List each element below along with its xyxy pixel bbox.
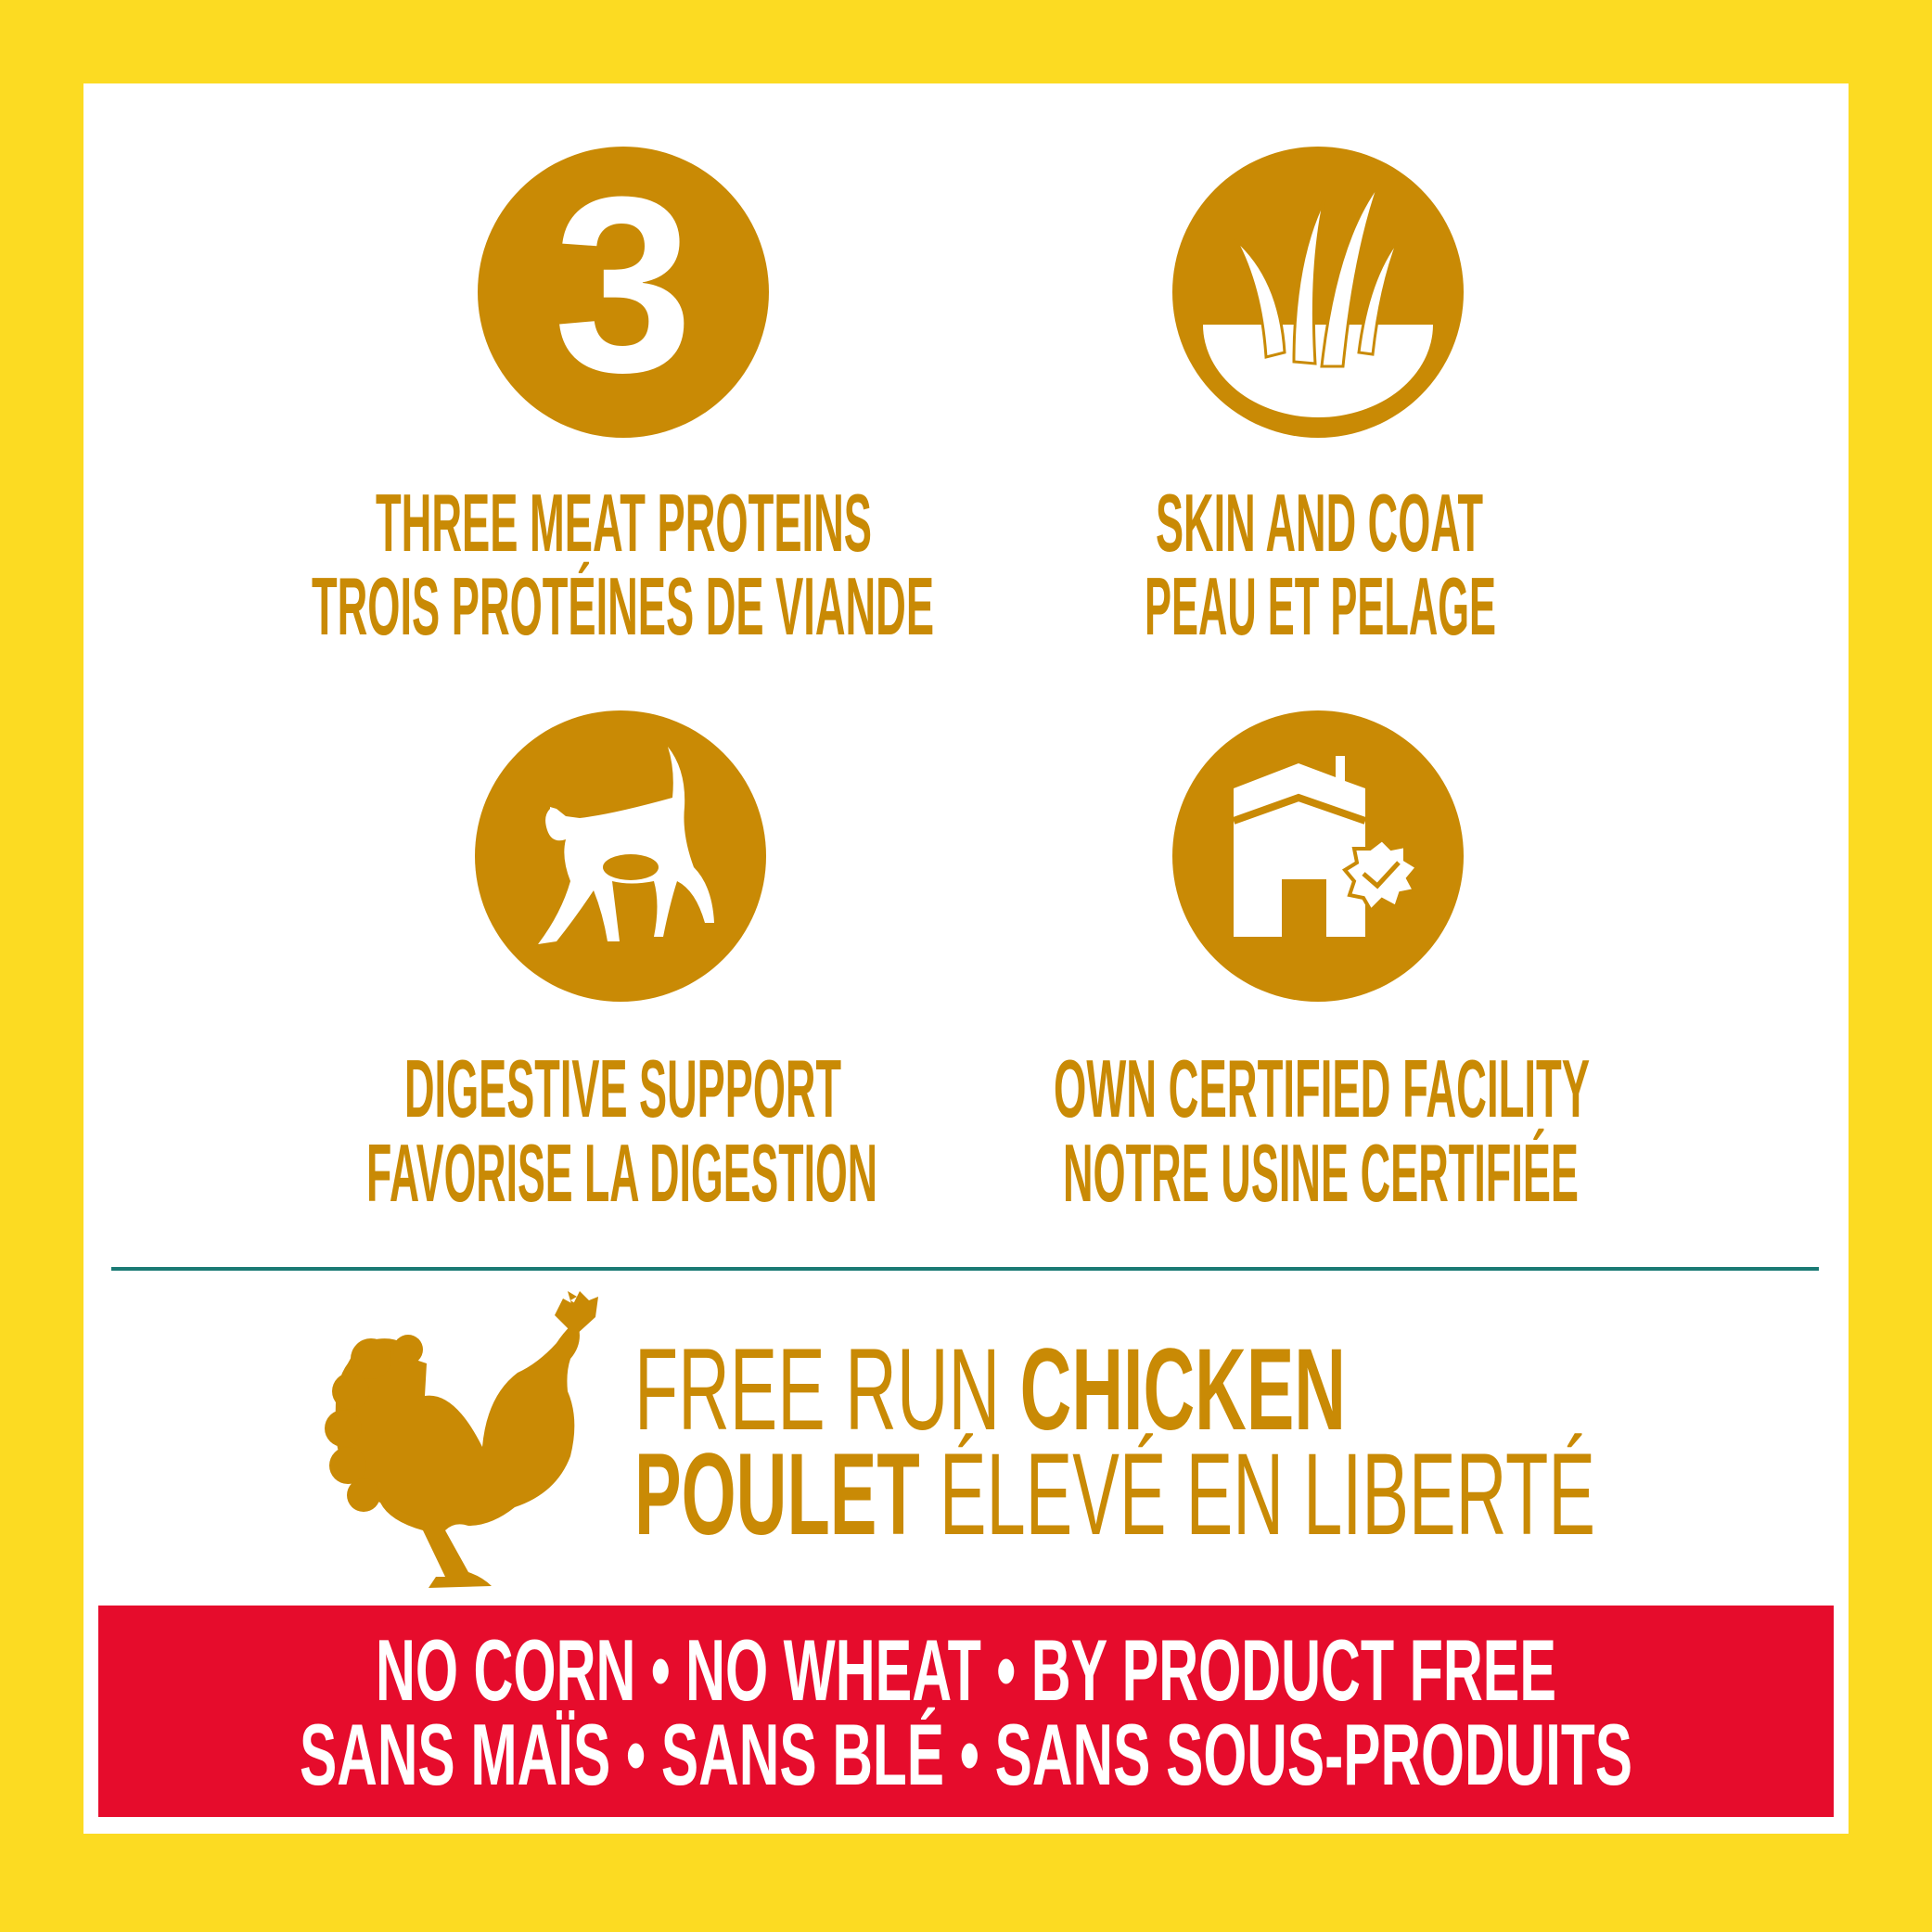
icon: certified facility house <box>1172 710 1464 1002</box>
icon: three proteins <box>478 146 769 438</box>
heading: three meat proteins: THREE MEAT PROTEINS <box>376 477 872 569</box>
heading: three meat proteins <box>312 477 934 652</box>
icon: chicken <box>325 1291 598 1588</box>
heading: free run chicken <box>634 1325 1595 1559</box>
icon: three proteins: 3 <box>554 146 693 425</box>
heading: digestive support: FAVORISE LA DIGESTION <box>366 1127 877 1219</box>
heading: digestive support <box>366 1043 877 1219</box>
icon: skin and coat <box>1172 147 1464 438</box>
banner: no corn no wheat <box>98 1606 1834 1817</box>
heading: free run chicken: FREE RUN CHICKEN <box>634 1325 1346 1454</box>
icon: digestive support cat <box>475 710 766 1002</box>
text: PEAU ET PELAGE <box>1145 560 1496 652</box>
heading: own certified facility <box>1054 1043 1590 1219</box>
heading: three meat proteins: TROIS PROTÉINES DE VIANDE <box>312 560 934 652</box>
heading: skin and coat <box>1145 477 1496 652</box>
heading: skin and coat: SKIN AND COAT <box>1156 477 1483 569</box>
heading: digestive support: DIGESTIVE SUPPORT <box>404 1043 841 1134</box>
